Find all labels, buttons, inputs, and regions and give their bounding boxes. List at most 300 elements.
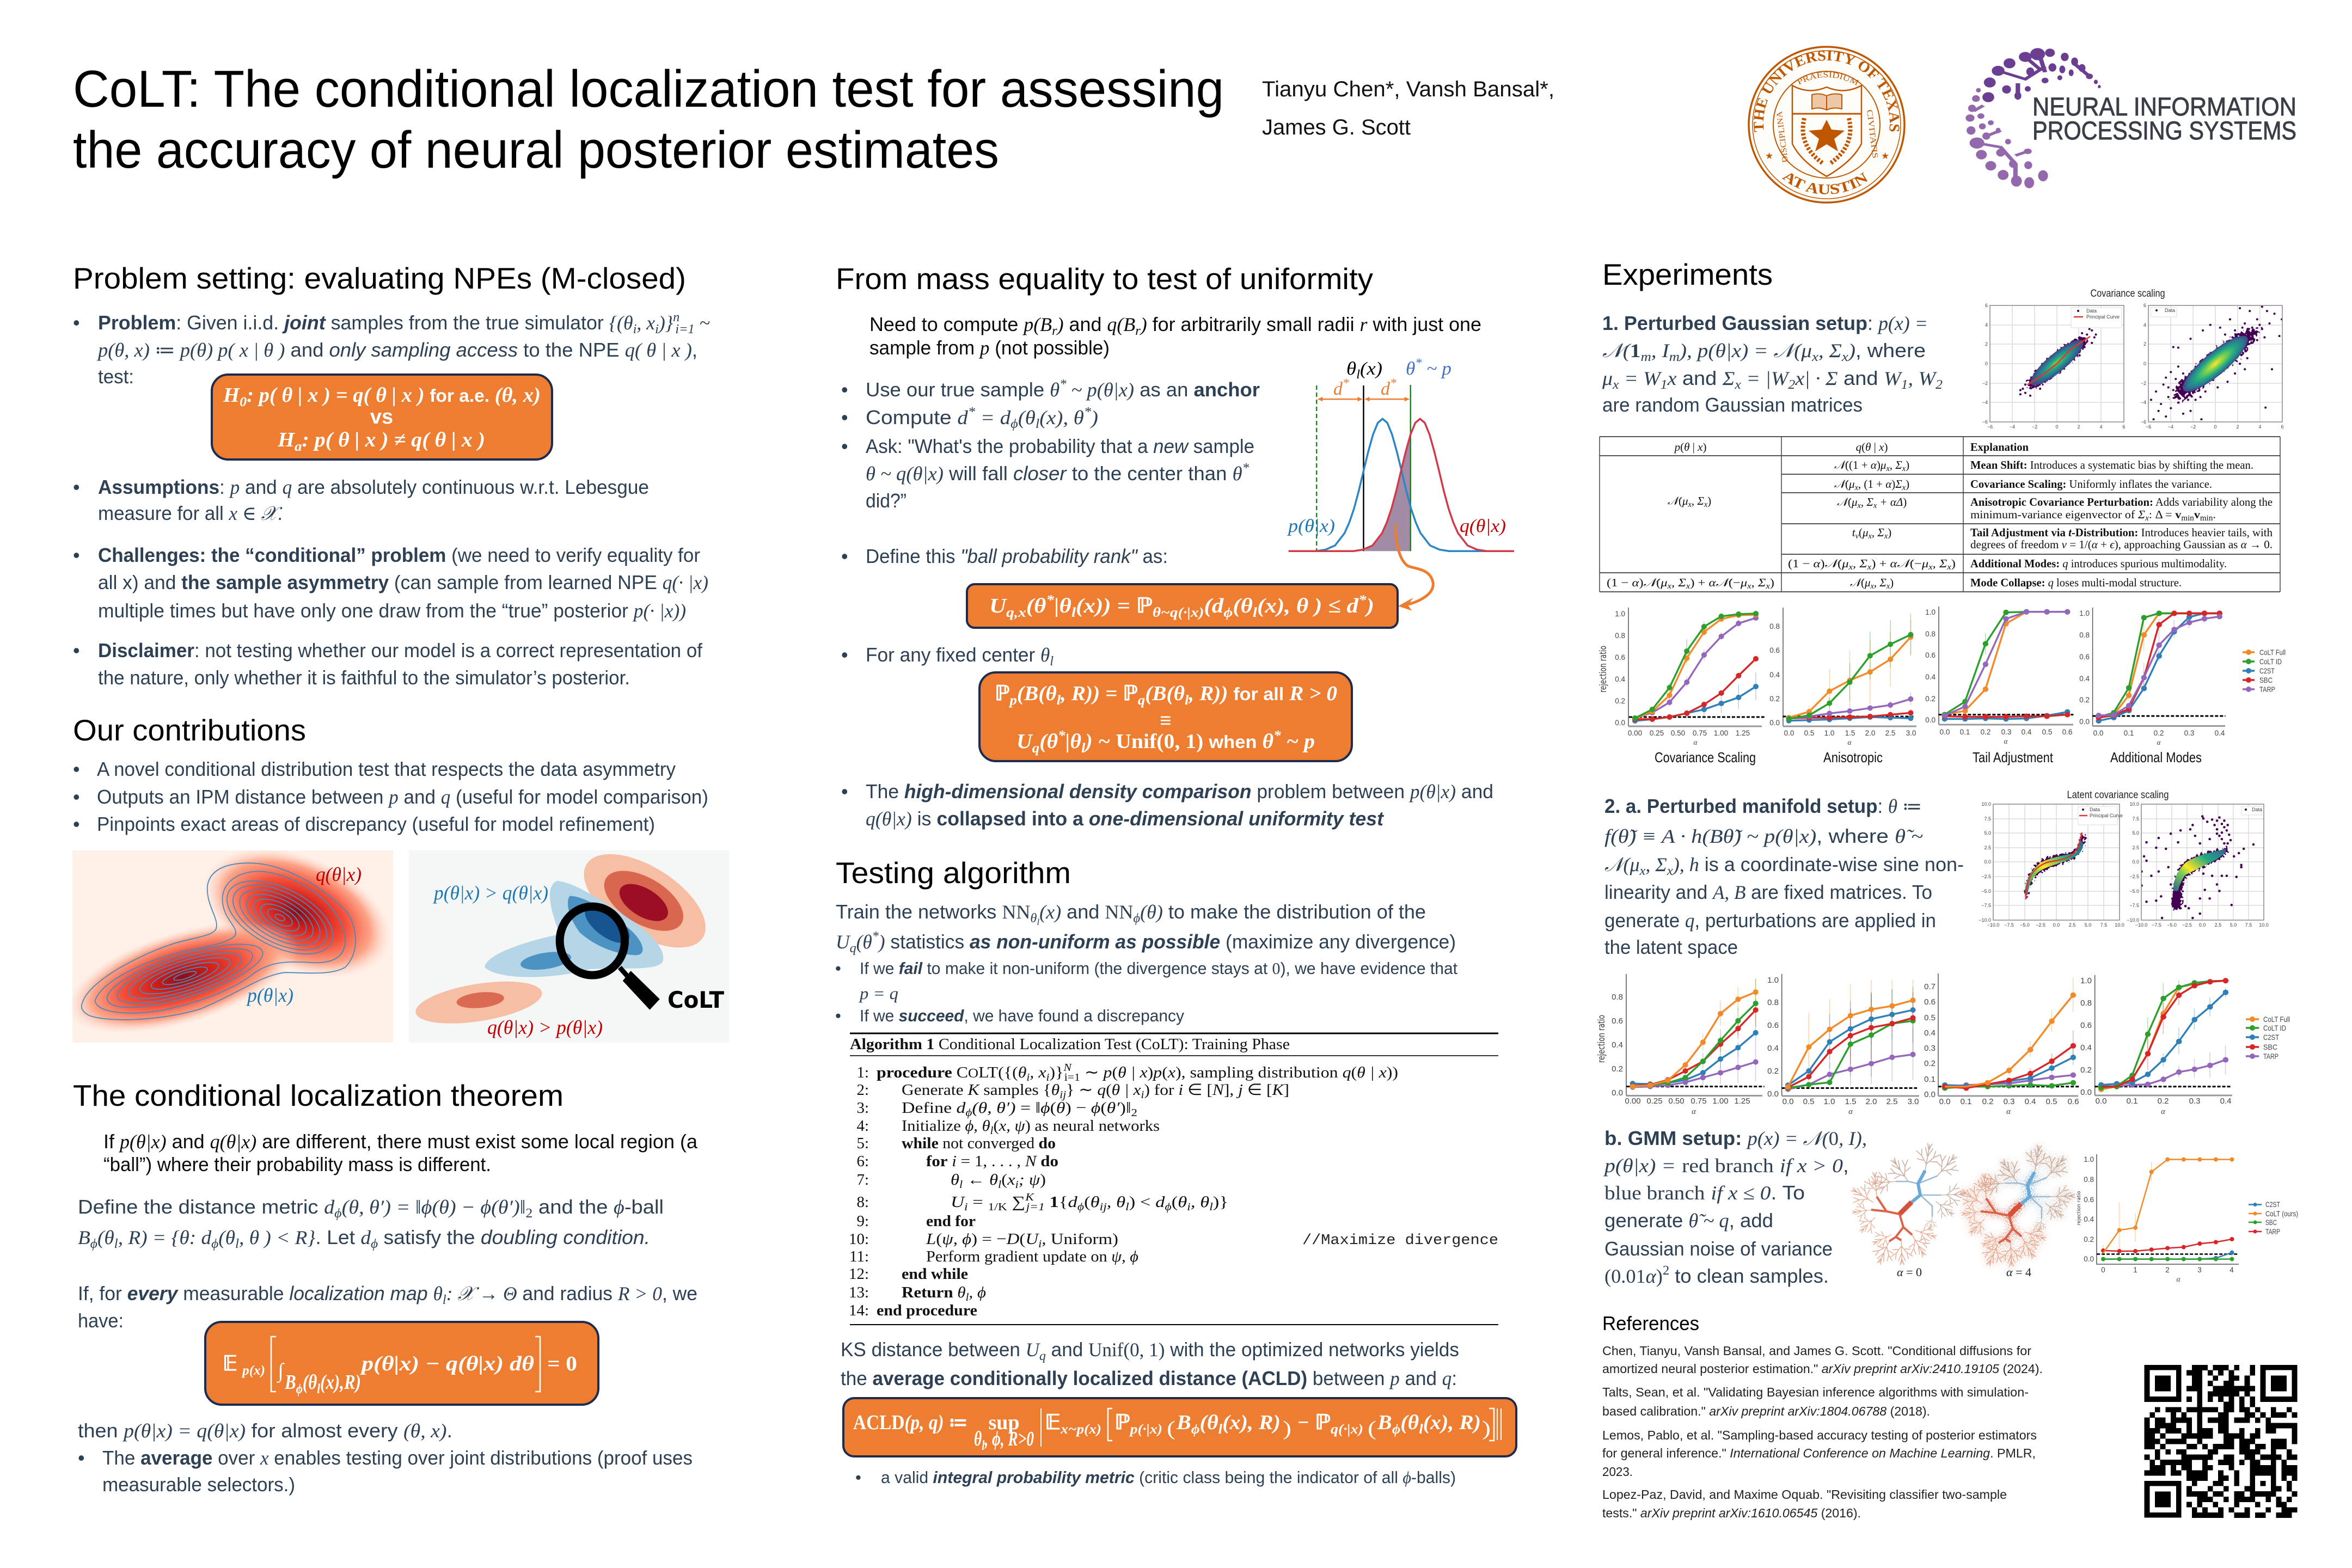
chart: manifold anisotropic: 1.5	[1845, 1097, 1856, 1106]
figure: two gaussians with ball radius: d*	[1333, 376, 1349, 399]
algorithm box	[849, 1033, 1498, 1325]
legend: methods: TARP	[2259, 685, 2275, 694]
heading: testing algorithm: Testing algorithm	[836, 856, 1071, 890]
chart: manifold anisotropic	[1767, 974, 1919, 1116]
chart: GMM rejection ratio: 0.6	[2084, 1196, 2094, 1204]
chart captions: Covariance Scaling	[1655, 749, 1756, 765]
text: collapse bullet: •	[841, 780, 848, 803]
chart: GMM rejection ratio	[2077, 1154, 2298, 1283]
chart: GMM rejection ratio: 0.2	[2084, 1235, 2094, 1244]
text: reference list: Lopez-Paz, David, and Maxime Oquab. "Revisiting classifier two-sample	[1602, 1487, 2007, 1502]
chart: covariance scaling: 1.25	[1736, 729, 1750, 737]
text: challenges bullet: •	[73, 544, 80, 566]
chart: manifold tail adjustment: 0.3	[1924, 1044, 1935, 1053]
text: reference list: tests." arXiv preprint arXiv:1610.06545 (2016).	[1602, 1506, 1861, 1520]
chart: manifold additional modes: 0.6	[2080, 1021, 2092, 1030]
figure: CoLT magnifying glass over discrepancy regions	[409, 840, 729, 1043]
figure: latent covariance scaling scatter plots: −10.0	[2135, 922, 2147, 928]
figure: latent covariance scaling scatter plots: 5.0	[2230, 922, 2237, 928]
figure: latent covariance scaling scatter plots: 2.5	[1984, 845, 1991, 850]
figure: two gaussians with ball radius: p(θ|x)	[1287, 516, 1335, 536]
legend: methods: C2ST	[2259, 666, 2275, 675]
text: assumptions bullet: Assumptions: p and q are absolutely continuous w.r.t. Lebesgue	[98, 476, 649, 498]
figure: covariance scaling scatter plots: 0	[2143, 361, 2146, 366]
text: contributions list: A novel conditional distribution test that respects the data asymmetry	[97, 758, 676, 780]
figure: covariance scaling scatter plots: −4	[1982, 400, 1988, 405]
figure: latent covariance scaling scatter plots: Principal Curve	[2090, 813, 2123, 818]
text: challenges bullet: Challenges: the “conditional” problem (we need to verify equality for	[98, 544, 700, 566]
chart: additional modes: 0.6	[2079, 653, 2090, 661]
chart: GMM rejection ratio: rejection ratio	[2077, 1191, 2082, 1225]
figure: latent covariance scaling scatter plots: −2.5	[2036, 922, 2045, 928]
chart: covariance scaling: α	[1693, 738, 1698, 746]
chart: manifold tail adjustment: 0.5	[2046, 1097, 2057, 1106]
chart: manifold anisotropic: 2.5	[1886, 1097, 1897, 1106]
chart: manifold tail adjustment: 0.5	[1924, 1013, 1935, 1022]
text: theorem conclusion	[78, 1419, 693, 1496]
chart: manifold anisotropic: 0.4	[1767, 1044, 1779, 1053]
algorithm box: 13:	[849, 1284, 869, 1301]
text: fixed center bullet: For any fixed center θl	[866, 644, 1054, 669]
chart: tail adjustment: 0.3	[2001, 728, 2011, 736]
figure: two gaussians with ball radius: θl(x)	[1346, 359, 1382, 382]
callout: ACLD equation: )	[1482, 1417, 1491, 1440]
chart: manifold anisotropic: 1.0	[1767, 976, 1779, 985]
text: assumptions bullet: •	[73, 476, 80, 498]
table: perturbation types: Covariance Scaling: Uniformly inflates the variance.	[1970, 477, 2212, 491]
chart captions: Anisotropic	[1823, 749, 1883, 765]
chart: covariance scaling	[1615, 608, 1765, 746]
chart: additional modes: 0.1	[2124, 729, 2134, 737]
chart: tail adjustment: 0.4	[1925, 673, 1935, 681]
chart: manifold tail adjustment: 0.4	[1924, 1028, 1935, 1038]
text: perturbed manifold setup: 𝒩(μx, Σx), h is a coordinate-wise sine non-	[1604, 853, 1964, 878]
chart: tail adjustment: 0.5	[2042, 728, 2052, 736]
chart: tail adjustment: 0.6	[2062, 728, 2072, 736]
text: contributions list: Outputs an IPM distance between p and q (useful for model comparison)	[97, 786, 708, 808]
text: problem bullet: •	[73, 311, 80, 334]
chart: manifold tail adjustment: 0.2	[1924, 1059, 1935, 1068]
title: CoLT: The conditional localization test for assessing	[73, 60, 1224, 118]
chart: manifold additional modes: 0.4	[2220, 1097, 2231, 1106]
figure: covariance scaling scatter plots: −4	[2168, 424, 2173, 430]
chart: manifold tail adjustment: 0.0	[1924, 1090, 1935, 1099]
chart: covariance scaling: 1.00	[1714, 729, 1728, 737]
chart: tail adjustment: 0.0	[1940, 728, 1950, 736]
text: reference list: based calibration." arXiv preprint arXiv:1804.06788 (2018).	[1602, 1404, 1930, 1418]
text: disclaimer bullet: the nature, only whether it is faithful to the simulator’s posterior.	[98, 666, 630, 689]
chart: anisotropic	[1769, 608, 1916, 746]
chart: manifold tail adjustment: 0.1	[1924, 1075, 1935, 1084]
text: training description	[836, 901, 1456, 955]
text: theorem statement: If, for every measurable localization map θl: 𝒳 → Θ and radius R > 0, we	[78, 1282, 697, 1307]
figure: covariance scaling scatter plots: −6	[2141, 419, 2146, 425]
text: assumptions bullet: measure for all x ∈ 𝒳.	[98, 502, 283, 524]
figure: covariance scaling scatter plots: −6	[1987, 424, 1993, 430]
figure: covariance scaling scatter plots: −6	[1982, 419, 1988, 425]
figure: branching GMM trees	[1846, 1142, 2075, 1279]
chart: tail adjustment: 0.8	[1925, 630, 1935, 638]
chart: manifold tail adjustment: 0.1	[1961, 1097, 1971, 1106]
table: perturbation types: Additional Modes: q introduces spurious multimodality.	[1970, 557, 2227, 570]
algorithm box: for i = 1, . . . , N do	[926, 1153, 1058, 1170]
callout: ball probability rank: Uq,x(θ*|θl(x)) = ℙθ~q(·|x) (dϕ(θl(x), θ ) ≤ d *)	[989, 591, 1374, 620]
figure: latent covariance scaling scatter plots: −7.5	[1981, 903, 1991, 908]
chart: anisotropic: 1.0	[1824, 729, 1834, 737]
chart: additional modes: 0.0	[2093, 729, 2103, 737]
figure: latent covariance scaling scatter plots	[1979, 789, 2269, 928]
logo: University of Texas seal: AT AUSTIN	[1781, 172, 1867, 194]
callout: ACLD equation: Bϕ(θl(x), R)	[1377, 1411, 1481, 1437]
chart: manifold additional modes: 0.3	[2189, 1097, 2200, 1106]
chart: manifold covariance scaling: 0.75	[1690, 1097, 1707, 1106]
axis label: rejection ratio: rejection ratio	[1598, 646, 1609, 693]
text: training description: Train the networks NNθl(x) and NNϕ(θ) to make the distribution of the	[836, 901, 1426, 927]
figure: covariance scaling scatter plots: Covariance scaling	[2091, 288, 2165, 299]
figure: CoLT magnifying glass over discrepancy regions: CoLT	[667, 987, 724, 1013]
chart: manifold anisotropic: 0.0	[1783, 1097, 1793, 1106]
text: problem bullet: p(θ, x) ≔ p(θ) p( x | θ ) and only sampling access to the NPE q( θ | x ),	[96, 339, 697, 361]
text: GMM setup: (0.01α)2 to clean samples.	[1604, 1263, 1829, 1287]
callout: integral equation: Bϕ(θl(x),R)	[284, 1371, 361, 1396]
algorithm box: 1:	[856, 1064, 869, 1081]
text: anchor bullets: Define this "ball probability rank" as:	[866, 545, 1168, 567]
legend: methods: CoLT ID	[2259, 657, 2282, 666]
text: need to compute: Need to compute p(Br) and q(Br) for arbitrarily small radii r with just one	[869, 313, 1481, 338]
chart: manifold additional modes: 0.1	[2127, 1097, 2137, 1106]
text: challenges bullet: multiple times but have only one draw from the “true” posterior p(· |x))	[98, 599, 686, 622]
algorithm box: 5:	[856, 1135, 869, 1152]
figure: latent covariance scaling scatter plots: −5.0	[2020, 922, 2030, 928]
figure: covariance scaling scatter plots: 4	[2143, 322, 2146, 328]
figure: CoLT magnifying glass over discrepancy regions: q(θ|x) > p(θ|x)	[487, 1016, 603, 1038]
callout: ACLD equation: ℙp(·|x)	[1114, 1411, 1162, 1437]
text: theorem conclusion: measurable selectors.)	[102, 1473, 295, 1496]
text: challenges bullet	[73, 544, 708, 622]
figure: covariance scaling scatter plots: −2	[2141, 381, 2146, 386]
figure: covariance scaling scatter plots: 2	[2143, 341, 2146, 347]
figure: two gaussians with ball radius: d*	[1381, 376, 1396, 399]
text: theorem conclusion: The average over x enables testing over joint distributions (proof uses	[102, 1447, 693, 1469]
algorithm box: 4:	[856, 1117, 869, 1135]
text: anchor bullets: Use our true sample θ* ~ p(θ|x) as an anchor	[866, 377, 1260, 401]
figure: branching GMM trees: α = 4	[2006, 1265, 2031, 1279]
table: perturbation types: Mean Shift: Introduces a systematic bias by shifting the mean.	[1970, 458, 2253, 471]
chart: additional modes: 0.3	[2184, 729, 2194, 737]
figure: covariance scaling scatter plots: 6	[2143, 303, 2146, 308]
callout: equivalence	[979, 672, 1352, 761]
chart: manifold covariance scaling: 0.2	[1612, 1064, 1623, 1074]
chart: manifold covariance scaling: 0.50	[1668, 1097, 1685, 1106]
callout: hypotheses	[212, 375, 552, 460]
logo: University of Texas seal: DISCIPLINA	[1775, 111, 1790, 163]
algorithm box: Perform gradient update on ψ, ϕ	[926, 1248, 1138, 1265]
charts: manifold setup rejection ratio	[1596, 973, 2290, 1116]
callout: ACLD equation: (	[1167, 1417, 1175, 1440]
authors: Tianyu Chen*, Vansh Bansal*,	[1262, 77, 1554, 101]
algorithm box: Return θl, ϕ	[902, 1284, 986, 1303]
text: fail and succeed bullets: If we fail to make it non-uniform (the divergence stays at 0), we have evidence that	[860, 959, 1457, 978]
chart: covariance scaling: 0.0	[1615, 719, 1625, 727]
chart: additional modes: 0.4	[2215, 729, 2225, 737]
text: fail and succeed bullets: p = q	[859, 984, 898, 1003]
table: perturbation types: 𝒩(μx, Σx)	[1850, 576, 1894, 591]
chart: anisotropic: 0.0	[1769, 719, 1780, 727]
chart: manifold tail adjustment: 0.6	[1924, 997, 1935, 1007]
chart: additional modes	[2079, 608, 2226, 746]
text: perturbed manifold setup	[1604, 795, 1964, 958]
chart: anisotropic: 2.0	[1865, 729, 1875, 737]
callout: integral equation: 𝔼 p(x)	[223, 1352, 265, 1378]
chart: manifold tail adjustment: α	[2006, 1107, 2011, 1116]
algorithm box: 11:	[849, 1248, 869, 1265]
algorithm box: Initialize ϕ, θl(x, ψ) as neural networks	[902, 1117, 1160, 1137]
chart: tail adjustment: 0.1	[1960, 728, 1970, 736]
table: perturbation types: (1 − α)𝒩(μx, Σ x) + α𝒩(−μx, Σ x)	[1788, 557, 1956, 572]
text: collapse bullet	[841, 780, 1493, 830]
chart: manifold additional modes: 0.0	[2080, 1088, 2092, 1097]
figure: latent covariance scaling scatter plots: −10.0	[1979, 917, 1991, 923]
table: perturbation types: Explanation	[1970, 440, 2029, 454]
figure: latent covariance scaling scatter plots: 0.0	[2053, 922, 2060, 928]
legend: methods	[2246, 1015, 2290, 1061]
text: fail and succeed bullets: If we succeed, we have found a discrepancy	[860, 1006, 1184, 1025]
figure: CoLT magnifying glass over discrepancy regions: p(θ|x) > q(θ|x)	[432, 882, 548, 904]
text: reference list: amortized neural posterior estimation." arXiv preprint arXiv:2410.19105 (2024).	[1602, 1362, 2043, 1376]
figure: latent covariance scaling scatter plots: 7.5	[2245, 922, 2252, 928]
figure: latent covariance scaling scatter plots: 7.5	[2100, 922, 2107, 928]
chart: manifold covariance scaling: 0.6	[1612, 1016, 1623, 1026]
table: perturbation types: (1 − α)𝒩(μx, Σ x) + α𝒩(−μx, Σ x)	[1607, 576, 1774, 591]
chart: additional modes: 0.2	[2079, 696, 2090, 704]
text: contributions list: •	[73, 758, 80, 780]
chart: manifold additional modes: 0.2	[2158, 1097, 2169, 1106]
callout: equivalence: Uq(θ*|θl) ~ Unif(0, 1) when θ* ~ p	[1016, 727, 1315, 756]
figure: covariance scaling scatter plots: 2	[2077, 424, 2080, 430]
logo: University of Texas seal: ★	[1881, 151, 1889, 161]
text: anchor bullets: Compute d* = dϕ(θl(x), θ*)	[866, 405, 1098, 431]
text: challenges bullet: all x) and the sample asymmetry (can sample from learned NPE q(· |x)	[98, 571, 708, 593]
callout: equivalence: ℙp(B(θl, R)) = ℙq(B(θl, R)) for all R > 0	[995, 682, 1337, 708]
figure: latent covariance scaling scatter plots: Latent covariance scaling	[2067, 789, 2169, 801]
figure: covariance scaling scatter plots: −2	[2190, 424, 2196, 430]
heading: our contributions: Our contributions	[73, 713, 306, 747]
heading: experiments: Experiments	[1602, 258, 1773, 291]
figure: latent covariance scaling scatter plots: 7.5	[2132, 816, 2139, 822]
algorithm box: while not converged do	[902, 1135, 1056, 1152]
algorithm box: Ui = 1/K ∑ Kj=1 1{dϕ(θij, θ l) < dϕ(θi, θ l)}	[951, 1191, 1228, 1213]
table: perturbation types: p(θ | x)	[1674, 440, 1706, 454]
chart: covariance scaling: 1.0	[1615, 610, 1625, 618]
chart: tail adjustment: 0.0	[1925, 716, 1935, 724]
figure: latent covariance scaling scatter plots: 5.0	[2132, 830, 2139, 836]
chart: anisotropic: 0.2	[1769, 695, 1780, 703]
figure: covariance scaling scatter plots: 0	[1985, 361, 1988, 366]
figure: covariance scaling scatter plots: −2	[1982, 381, 1988, 386]
algorithm box: Algorithm 1 Conditional Localization Test (CoLT): Training Phase	[850, 1036, 1290, 1053]
figure: latent covariance scaling scatter plots: −7.5	[2004, 922, 2014, 928]
chart: manifold additional modes: 0.8	[2080, 999, 2092, 1008]
figure: covariance scaling scatter plots: 4	[2099, 424, 2103, 430]
text: perturbed manifold setup: f(θ̃) ≡ A · h(Bθ̃) ~ p(θ|x) , where θ̃ ~	[1604, 825, 1923, 847]
callout: ACLD equation	[843, 1398, 1516, 1456]
text: valid IPM bullet: •	[855, 1468, 861, 1487]
chart: tail adjustment: 1.0	[1925, 608, 1935, 616]
heading: references: References	[1602, 1312, 1699, 1334]
text: KS distance	[841, 1338, 1459, 1389]
chart: manifold covariance scaling: 1.25	[1734, 1097, 1750, 1106]
text: reference list	[1602, 1344, 2043, 1520]
figure: latent covariance scaling scatter plots: 10.0	[1981, 801, 1991, 807]
text: contributions list: Pinpoints exact areas of discrepancy (useful for model refinement)	[97, 813, 655, 835]
figure: latent covariance scaling scatter plots: −2.5	[2182, 922, 2192, 928]
chart: anisotropic: 1.5	[1845, 729, 1855, 737]
heading: theorem: The conditional localization theorem	[73, 1079, 564, 1112]
logo: University of Texas seal: ★	[1765, 151, 1773, 161]
callout: ACLD equation: 𝔼x~p(x)	[1045, 1411, 1101, 1437]
figure: latent covariance scaling scatter plots: −7.5	[2129, 903, 2139, 908]
chart: GMM rejection ratio: 4	[2230, 1266, 2234, 1274]
legend: methods	[2243, 648, 2286, 694]
chart: manifold covariance scaling: α	[1692, 1107, 1696, 1116]
figure: covariance scaling scatter plots: Data	[2165, 308, 2175, 313]
chart: manifold additional modes	[2080, 975, 2232, 1116]
callout: ACLD equation: Bϕ(θl(x), R)	[1176, 1411, 1281, 1437]
text: anchor bullets: •	[841, 406, 848, 428]
legend: GMM methods: TARP	[2265, 1227, 2280, 1236]
chart: anisotropic: α	[1847, 738, 1852, 746]
text: KS distance: KS distance between Uq and Unif(0, 1) with the optimized networks yields	[841, 1338, 1459, 1363]
text: fail and succeed bullets: •	[835, 1006, 841, 1025]
chart: additional modes: 0.8	[2079, 631, 2090, 639]
chart: additional modes: 0.2	[2154, 729, 2164, 737]
text: GMM setup: Gaussian noise of variance	[1604, 1238, 1833, 1260]
text: distance metric definition: Bϕ(θl, R) = {θ: dϕ(θl, θ ) < R}. Let dϕ satisfy the doubling condition.	[78, 1226, 650, 1251]
callout: ball probability rank	[967, 584, 1398, 628]
algorithm box: 9:	[856, 1212, 869, 1230]
chart: manifold tail adjustment	[1924, 973, 2079, 1116]
legend: GMM methods: C2ST	[2265, 1200, 2280, 1209]
text: disclaimer bullet: Disclaimer: not testing whether our model is a correct representation of	[98, 639, 703, 661]
text: problem bullet: Problem: Given i.i.d. joint samples from the true simulator {(θi, xi)}ni=1 ~	[98, 310, 710, 336]
text: contributions list: •	[73, 786, 80, 808]
chart: additional modes: α	[2157, 738, 2161, 746]
legend: methods: SBC	[2263, 1043, 2277, 1051]
heading: mass equality: From mass equality to test of uniformity	[836, 262, 1374, 296]
text: theorem conclusion: •	[78, 1447, 85, 1469]
callout: ACLD equation: )	[1283, 1417, 1291, 1440]
chart: covariance scaling: 0.2	[1615, 697, 1625, 705]
figure: covariance scaling scatter plots: 4	[2258, 424, 2262, 430]
chart: manifold covariance scaling: 0.0	[1612, 1088, 1623, 1098]
text: valid IPM bullet: a valid integral probability metric (critic class being the indicator of all ϕ-balls)	[881, 1468, 1456, 1487]
figure: latent covariance scaling scatter plots: −10.0	[2127, 917, 2139, 923]
text: collapse bullet: q(θ|x) is collapsed into a one-dimensional uniformity test	[866, 807, 1385, 830]
chart: anisotropic: 0.6	[1769, 646, 1780, 654]
table: perturbation types: q(θ | x)	[1856, 440, 1888, 454]
chart: covariance scaling: 0.00	[1628, 729, 1642, 737]
chart: additional modes: 0.4	[2079, 675, 2090, 683]
text: fail and succeed bullets: •	[835, 959, 841, 978]
figure: latent covariance scaling scatter plots: Data	[2090, 807, 2100, 812]
QR code	[2145, 1365, 2297, 1518]
figure: latent covariance scaling scatter plots: 10.0	[2259, 922, 2269, 928]
chart: manifold covariance scaling: 0.00	[1625, 1097, 1641, 1106]
text: disclaimer bullet	[73, 639, 703, 689]
text: need to compute	[869, 313, 1481, 359]
chart: manifold anisotropic: α	[1848, 1107, 1853, 1116]
panel: from mass equality to uniformity	[836, 262, 1514, 830]
figure: covariance scaling scatter plots: −4	[2141, 400, 2146, 405]
chart: anisotropic: 3.0	[1906, 729, 1916, 737]
table: perturbation types: Tail Adjustment via t-Distribution: Introduces heavier tails, with	[1970, 526, 2273, 539]
algorithm box: 3:	[856, 1099, 869, 1117]
chart: manifold anisotropic: 0.0	[1767, 1089, 1779, 1099]
chart: GMM rejection ratio: 1.0	[2084, 1155, 2094, 1163]
callout: equivalence: ≡	[1160, 709, 1172, 732]
callout: ACLD equation: (	[1368, 1417, 1376, 1440]
figure: latent covariance scaling scatter plots: 0.0	[1984, 859, 1991, 865]
text: reference list: Talts, Sean, et al. "Validating Bayesian inference algorithms with simulation-	[1602, 1385, 2029, 1399]
text: theorem statement	[78, 1282, 697, 1332]
chart: covariance scaling: 0.6	[1615, 653, 1625, 661]
chart: covariance scaling: 0.8	[1615, 632, 1625, 640]
figure: latent covariance scaling scatter plots: 5.0	[2085, 922, 2091, 928]
text: reference list: for general inference." International Conference on Machine Learning. PMLR,	[1602, 1446, 2036, 1460]
chart: manifold anisotropic: 2.0	[1866, 1097, 1877, 1106]
algorithm box: θl ← θl(xi; ψ)	[951, 1171, 1046, 1191]
chart: manifold covariance scaling	[1612, 974, 1765, 1116]
text: anchor bullets	[841, 377, 1260, 567]
panel: our contributions	[72, 719, 729, 1043]
chart: covariance scaling: 0.75	[1693, 729, 1707, 737]
callout: integral equation: p(θ|x) − q(θ|x) dθ	[360, 1352, 534, 1375]
algorithm box: 2:	[856, 1081, 869, 1099]
text: problem bullet	[73, 310, 710, 388]
logo: NeurIPS	[1965, 48, 2296, 188]
callout: ACLD equation: θl, ϕ, R>0	[974, 1428, 1034, 1453]
text: need to compute: sample from p (not possible)	[869, 336, 1110, 359]
title	[73, 60, 1224, 179]
table: perturbation types: Mode Collapse: q loses multi-modal structure.	[1970, 576, 2182, 589]
text: perturbed gaussian setup	[1602, 312, 1943, 416]
table: perturbation types: 𝒩(μx, (1 + α)Σx)	[1834, 477, 1909, 492]
chart: GMM rejection ratio: 0.4	[2084, 1215, 2094, 1223]
text: reference list: 2023.	[1602, 1465, 1633, 1479]
text: perturbed manifold setup: generate q, perturbations are applied in	[1604, 909, 1936, 932]
text: perturbed gaussian setup: μx = W1x and Σx = |W2x| · Σ and W1, W2	[1602, 367, 1943, 392]
chart: manifold covariance scaling: 1.00	[1712, 1097, 1729, 1106]
algorithm box: 7:	[856, 1171, 869, 1189]
panel: experiments	[1596, 258, 2298, 1287]
chart: manifold tail adjustment: 0.0	[1939, 1097, 1950, 1106]
axis label: rejection ratio: rejection ratio	[1596, 1015, 1607, 1063]
text: theorem statement: have:	[78, 1309, 124, 1332]
chart: tail adjustment: 0.2	[1925, 695, 1935, 703]
legend: GMM methods	[2249, 1200, 2298, 1236]
panel: problem setting	[73, 261, 710, 689]
text: disclaimer bullet: •	[73, 639, 80, 661]
text: theorem intuition: If p(θ|x) and q(θ|x) are different, there must exist some local region (a	[103, 1130, 698, 1153]
figure: covariance scaling scatter plots: Data	[2086, 308, 2097, 314]
panel: references	[1602, 1312, 2043, 1520]
text: reference list: Chen, Tianyu, Vansh Bansal, and James G. Scott. "Conditional diffusions for	[1602, 1344, 2031, 1358]
chart captions: Tail Adjustment	[1973, 749, 2054, 765]
text: anchor bullets: •	[841, 545, 848, 567]
figure: latent covariance scaling scatter plots: 0.0	[2132, 859, 2139, 865]
chart: manifold tail adjustment: 0.2	[1982, 1097, 1993, 1106]
text: anchor bullets: •	[841, 378, 848, 401]
